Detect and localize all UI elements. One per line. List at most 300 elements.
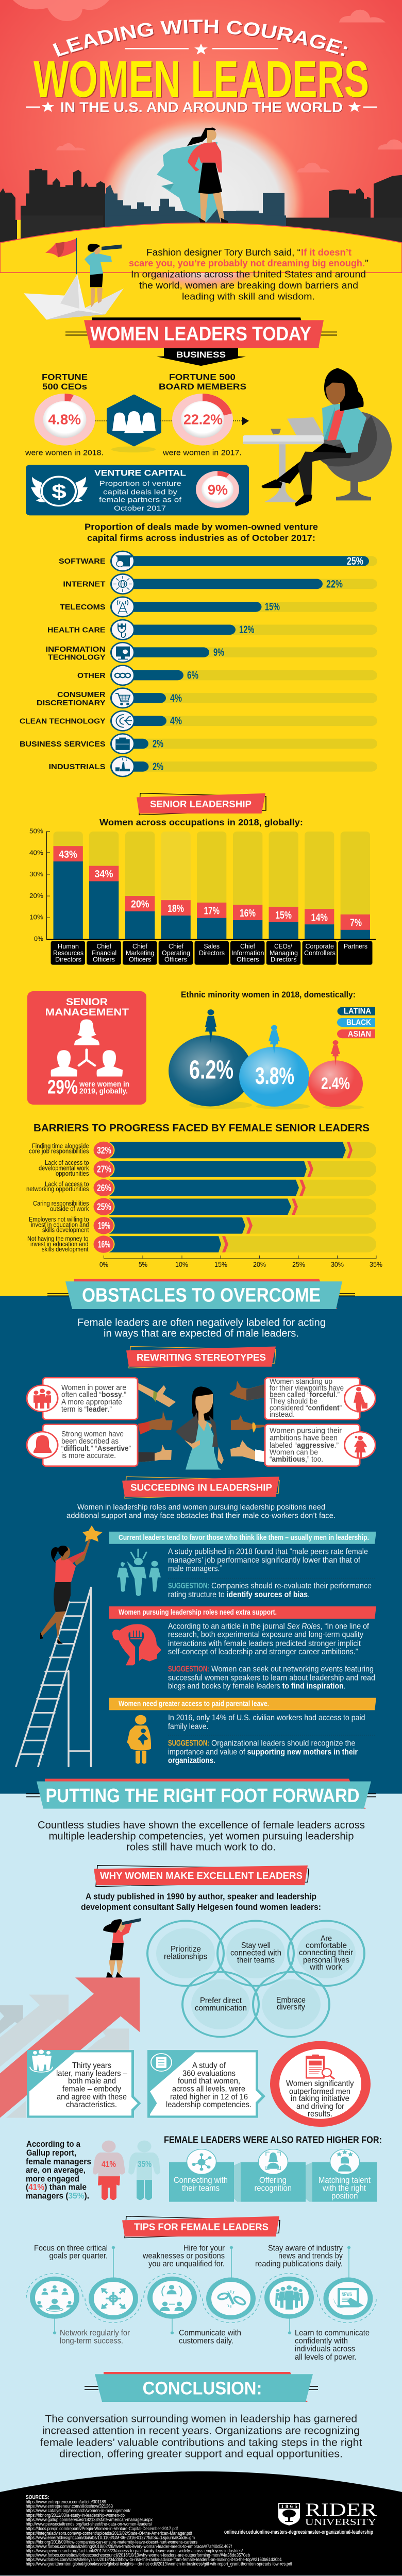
card: forceful vs confident: for their viewpoints have <box>270 1384 344 1393</box>
card: connecting with teams: their teams <box>182 2183 220 2193</box>
barrier: caring 25 percent <box>33 1197 376 1216</box>
column: chief financial officers: Officers <box>93 956 115 963</box>
x axis: 5% <box>139 1261 147 1269</box>
sources list: https://www.grantthornton.global/globalassets/global-insights---do-not-edit/2019/women-in-business/gtil-wib-report_grant-thornton-spreads-low-res.pdf <box>26 2562 292 2567</box>
barrier: not having the money 16 percent: invest in education and <box>30 1240 89 1248</box>
sun glow <box>99 115 305 291</box>
card: difficult vs assertive: Strong women have <box>61 1430 124 1438</box>
column chart: occupations <box>29 827 376 965</box>
bar: industrials: 2% <box>153 760 163 773</box>
text: gallup report: (41%) than male <box>26 2182 87 2192</box>
text: sex roles article and suggestion: According to an article in the journal Sex Roles, “In one line of <box>168 1621 369 1631</box>
column: human resources directors: Resources <box>53 949 83 957</box>
column: corporate controllers <box>302 832 337 965</box>
stems <box>54 2246 350 2334</box>
tip: stay aware of news: NEWS <box>342 2291 352 2298</box>
fortune 500 ceos stat <box>25 372 104 457</box>
column: chief information officers: Chief <box>240 942 255 950</box>
intro text: obstacles: Female leaders are often negatively labeled for acting <box>77 1316 326 1328</box>
conclusion text: direction, offering greater support and equal opportunities. <box>59 2448 343 2460</box>
title: leading with courage on an arc: LEADING WITH COURAGE: <box>53 20 347 57</box>
callout box: thirty years later: both male and <box>68 2076 116 2086</box>
card: bossy vs leader: often called “bossy.” <box>61 1391 126 1399</box>
heading: proportion of deals <box>85 522 318 543</box>
rated higher cards <box>169 2149 377 2202</box>
bar: software: 25% <box>347 555 363 567</box>
business arrow label: BUSINESS <box>176 349 226 360</box>
text: male peers study and suggestion: SUGGESTION: <box>168 1581 209 1590</box>
diagram: overlapping leadership trait circles: connecting their <box>299 1948 353 1957</box>
diagram: overlapping leadership trait circles: Stay well <box>241 1941 271 1950</box>
text: male peers study and suggestion: rating structure to identify sources of bias. <box>168 1589 310 1599</box>
icon: org hierarchy of people <box>51 1019 123 1076</box>
diagram: overlapping leadership trait circles <box>147 1921 364 2037</box>
tip: learn to communicate: individuals across <box>295 2344 355 2353</box>
barrier: caring 25 percent: 25% <box>97 1201 111 1212</box>
text: gallup report <box>26 2139 91 2200</box>
panel: senior management: SENIOR <box>66 996 108 1008</box>
text: helgesen study: A study published in 1990 by author, speaker and leadership <box>86 1892 316 1901</box>
diagram: overlapping leadership trait circles: relationships <box>164 1952 207 1961</box>
bar: business services: BUSINESS SERVICES <box>20 740 106 749</box>
tip: focus on goals: goals per quarter. <box>49 2251 108 2260</box>
illustration: woman with telescope on arrow <box>103 1918 141 1977</box>
column: chief marketing officers: Chief <box>132 942 147 950</box>
card: forceful vs confident: They should be <box>270 1398 317 1405</box>
sub-banner: why women make excellent leaders <box>94 1866 309 1887</box>
column: chief operating officers <box>159 832 193 965</box>
bar: information technology: 9% <box>213 646 224 658</box>
text: parental leave and suggestion <box>168 1713 376 1765</box>
intro text: succeeding <box>66 1503 336 1520</box>
x axis: 0% <box>99 1261 108 1269</box>
diagram: overlapping leadership trait circles: Embrace <box>276 1995 306 2005</box>
column: ceos managing directors: Directors <box>271 956 297 963</box>
icon: woman with telescope on paper boat <box>24 238 124 320</box>
column: chief financial officers: Financial <box>92 949 116 957</box>
x axis: 15% <box>214 1261 227 1269</box>
panel: venture capital: VENTURE CAPITAL <box>94 468 186 478</box>
bar: clean technology: CLEAN TECHNOLOGY <box>20 718 106 725</box>
ladder <box>16 1587 91 1767</box>
text: sex roles article and suggestion: SUGGESTION: <box>168 1664 209 1673</box>
tip: focus on goals: Focus on three critical <box>34 2243 108 2252</box>
intro quote text: Fashion designer Tory Burch said, “ <box>146 247 300 258</box>
figure: female managers 41 percent: 41% <box>102 2159 116 2169</box>
text: parental leave and suggestion: importance and value of supporting new mothers in their <box>168 1747 358 1756</box>
barrier: not having the money 16 percent: skills development <box>42 1245 89 1253</box>
conclusion text: female leaders’ valuable contributions and taking steps in the right <box>40 2436 362 2448</box>
sources list <box>26 2494 292 2567</box>
y axis: 30% <box>29 871 43 878</box>
thumbs up hands <box>138 1381 264 1462</box>
callout bar: extra support <box>109 1606 376 1619</box>
x axis: 10% <box>175 1261 188 1269</box>
column: chief operating officers: 18% <box>167 903 184 914</box>
sphere: latina 6.2 percent: 6.2% <box>189 1055 233 1084</box>
icon: clipboard with ring <box>151 2054 172 2071</box>
callout box: 360 evaluations: rated higher in 12 of 16 <box>170 2092 248 2101</box>
heading: women across occupations: Women across occupations in 2018, globally: <box>99 817 303 828</box>
sub-banner: tips for female leaders: TIPS FOR FEMALE LEADERS <box>134 2222 269 2233</box>
bar: internet: INTERNET <box>63 581 106 588</box>
barrier: networking 26 percent: networking opportunities <box>26 1185 89 1193</box>
intro quote text: leading with skill and wisdom. <box>182 291 315 302</box>
barrier: employers not willing 19 percent: Employers not willing to <box>29 1215 89 1223</box>
intro text: putting the right foot forward <box>38 1819 365 1853</box>
bar: other: OTHER <box>77 672 106 680</box>
bar: information technology: TECHNOLOGY <box>48 654 106 662</box>
diagram: overlapping leadership trait circles: Are <box>321 1934 332 1943</box>
fortune 500 ceos stat: 500 CEOs <box>42 382 87 392</box>
diagram: overlapping leadership trait circles: their teams <box>237 1956 275 1964</box>
column: partners <box>338 832 372 965</box>
fortune 500 ceos stat: were women in 2018. <box>25 449 104 457</box>
card: aggressive vs ambitious: labeled “aggressive.” <box>270 1441 339 1450</box>
callout circle: women outperformed men: results. <box>308 2109 332 2119</box>
bar: clean technology: 4% <box>170 715 182 727</box>
text: parental leave and suggestion: SUGGESTION: <box>168 1738 209 1748</box>
sub-banner: why women make excellent leaders: WHY WOMEN MAKE EXCELLENT LEADERS <box>100 1871 303 1882</box>
tip: hire for weaknesses <box>142 2243 253 2317</box>
column: sales directors: 17% <box>204 905 220 917</box>
illustration: woman on ladder reaching star <box>16 1526 103 1767</box>
card: difficult vs assertive: is more accurate. <box>61 1451 116 1460</box>
card: aggressive vs ambitious: ambitions have been <box>270 1433 338 1442</box>
column: human resources directors: Human <box>58 942 79 950</box>
y axis: 0% <box>34 936 43 943</box>
fortune 500 board members stat: 22.2% <box>183 412 223 428</box>
sources list: https://www.entrepreneur.com/article/301189 <box>26 2500 106 2505</box>
x axis: 25% <box>292 1261 305 1269</box>
bar: industrials: INDUSTRIALS <box>48 763 105 771</box>
subtitle: IN THE U.S. AND AROUND THE WORLD <box>60 99 343 115</box>
card: aggressive vs ambitious: Women pursuing their <box>270 1427 342 1435</box>
y axis: 10% <box>29 914 43 921</box>
callout box: thirty years later <box>27 2049 141 2118</box>
fortune 500 board members stat: BOARD MEMBERS <box>159 382 246 392</box>
section banner: obstacles to overcome <box>47 1279 355 1309</box>
icon: group of women <box>34 1388 51 1409</box>
barrier: finding time 32 percent: core job responsibilities <box>29 1147 89 1155</box>
card: matching talent: with the right <box>322 2183 366 2193</box>
card: matching talent <box>312 2149 377 2202</box>
bar: internet <box>63 574 377 594</box>
column: chief information officers: Officers <box>237 956 259 963</box>
logo: rider university: UNIVERSITY <box>305 2517 376 2528</box>
bar: consumer discretionary <box>37 688 377 708</box>
sub-banner: senior leadership <box>137 793 266 815</box>
card: bossy vs leader: Women in power are <box>61 1383 126 1392</box>
intro text: putting the right foot forward: multiple leadership competencies, yet women pursuing leadership <box>48 1830 354 1842</box>
column: ceos managing directors: Managing <box>270 949 298 957</box>
diagram: overlapping leadership trait circles: personal lives <box>303 1956 349 1964</box>
sources list: https://hbr.org/2012/03/a-study-in-leadership-women-do <box>26 2513 125 2518</box>
column: chief marketing officers: Marketing <box>126 949 154 957</box>
callout box: 360 evaluations: across all levels, were <box>172 2084 245 2093</box>
diagram: overlapping leadership trait circles: diversity <box>277 2003 306 2011</box>
icon: women in blue house shape <box>108 395 160 452</box>
tip: hire for weaknesses: you are unqualified for. <box>148 2259 225 2268</box>
card: forceful vs confident: been called “forceful.” <box>270 1391 340 1399</box>
card: connecting with teams: Connecting with <box>174 2175 228 2185</box>
fortune 500 ceos stat: FORTUNE <box>42 372 88 382</box>
callout box: 360 evaluations <box>147 2050 265 2118</box>
barrier: networking 26 percent: Lack of access to <box>45 1180 89 1188</box>
card: matching talent: Matching talent <box>319 2175 371 2185</box>
section banner: conclusion: CONCLUSION: <box>143 2379 262 2399</box>
tip: learn to communicate: all levels of power. <box>295 2352 357 2362</box>
tip: stay aware of news <box>255 2243 370 2317</box>
bar chart: barriers <box>26 1141 382 1269</box>
tip: learn to communicate <box>267 2279 370 2362</box>
intro text: succeeding: Women in leadership roles and women pursuing leadership positions need <box>77 1503 325 1512</box>
bar: telecoms: TELECOMS <box>60 603 105 612</box>
column: ceos managing directors <box>266 832 300 965</box>
text: male peers study and suggestion <box>168 1547 376 1599</box>
barrier: caring 25 percent: outside of work <box>50 1205 89 1212</box>
tip: stay aware of news: reading publications daily. <box>255 2259 343 2268</box>
fortune 500 board members stat: were women in 2017. <box>162 449 242 457</box>
callout box: thirty years later: and agree with these <box>57 2092 127 2101</box>
callout box: 360 evaluations: found that women, <box>178 2076 240 2086</box>
tip: network regularly: Network regularly for <box>60 2328 130 2337</box>
bar: telecoms: 15% <box>265 600 280 613</box>
barrier: employers not willing 19 percent <box>29 1215 376 1235</box>
callout box: 360 evaluations: leadership competencies. <box>166 2099 252 2109</box>
text: gallup report: managers (35%). <box>26 2191 89 2200</box>
intro quote text <box>129 247 368 302</box>
barrier: developmental work 27 percent <box>39 1159 376 1178</box>
tip: communicate with customers: Communicate with <box>179 2328 241 2337</box>
tip: network regularly <box>32 2279 130 2345</box>
intro quote text: the world, women are breaking down barriers and <box>139 280 358 291</box>
icon: people group <box>30 2049 53 2072</box>
bar: clean technology <box>20 711 377 731</box>
barrier: not having the money 16 percent: Not having the money to <box>27 1234 89 1242</box>
text: parental leave and suggestion: organizations. <box>168 1755 215 1765</box>
callout box: thirty years later: Thirty years <box>72 2060 111 2070</box>
icon: winged dollar: $ <box>52 481 66 502</box>
intro quote text: In organizations across the United States and around <box>131 269 366 280</box>
icon: woman profile with fist <box>112 1624 161 1665</box>
text: male peers study and suggestion: male managers.” <box>168 1564 222 1573</box>
sub-banner: rewriting stereotypes: REWRITING STEREOTYPES <box>137 1352 266 1363</box>
column: chief information officers: Information <box>231 949 264 957</box>
panel: venture capital: female partners as of <box>99 496 182 504</box>
bubble chart: ethnic minority women <box>169 1009 364 1109</box>
card: bossy vs leader <box>27 1378 138 1419</box>
y axis: 20% <box>29 892 43 900</box>
text: gallup report: are, on average, <box>26 2165 86 2175</box>
intro text: succeeding: additional support and may face obstacles that their male co-workers don’t face. <box>66 1512 336 1520</box>
conclusion text: increased attention in recent years. Organizations are recognizing <box>42 2425 360 2436</box>
panel: venture capital: Proportion of venture <box>99 480 181 488</box>
clouds <box>13 0 402 173</box>
donut: 9 percent <box>196 471 239 508</box>
icon: winged dollar <box>31 477 88 506</box>
y axis: 40% <box>29 849 43 857</box>
column: ceos managing directors: 15% <box>275 909 292 921</box>
sources list: https://www.forbes.com/sites/shelleyzalis/2018/04/28/how-to-rise-the-ranks-advice-from-female-leaders-on-making-it-to-the-top/#2163b61d30b1 <box>26 2557 282 2563</box>
sources list: http://www.pewsocialtrends.org/fact-sheet/the-data-on-women-leaders/ <box>26 2521 152 2527</box>
diagram: overlapping leadership trait circles: comfortable <box>306 1941 347 1950</box>
logo: rider university: 1865 <box>281 2504 297 2510</box>
fortune 500 board members stat <box>159 372 246 457</box>
sources list: https://hbr.org/2018/09/how-companies-can-ensure-maternity-leave-doesnt-hurt-womens-careers <box>26 2539 197 2545</box>
text: parental leave and suggestion: Organizational leaders should recognize the <box>211 1738 356 1748</box>
callout box: thirty years later: female – embody <box>62 2084 121 2093</box>
callout box: thirty years later: later, many leaders – <box>56 2069 127 2078</box>
illustration: seated woman with laptop <box>243 368 392 506</box>
heading: proportion of deals: capital firms across industries as of October 2017: <box>87 533 315 543</box>
callout box: 360 evaluations: 360 evaluations <box>182 2069 236 2078</box>
barrier: employers not willing 19 percent: 19% <box>98 1221 110 1231</box>
sources list: https://www.pewresearch.org/fact-tank/2017/03/23/access-to-paid-family-leave-varies-widely-across-employers-industries/ <box>26 2549 243 2554</box>
panel: venture capital: October 2017 <box>114 504 166 513</box>
legend: ethnicity: ASIAN <box>348 1029 371 1038</box>
sphere: black 3.8 percent <box>239 1025 309 1107</box>
card: difficult vs assertive: “difficult.” “Assertive” <box>61 1444 131 1452</box>
bar: health care <box>47 620 377 639</box>
section banner: conclusion <box>85 2372 318 2402</box>
callout circle: women outperformed men: Women significantly <box>286 2078 354 2088</box>
card: forceful vs confident <box>265 1378 375 1419</box>
sources list: https://www.entrepreneur.com/slideshow/321363 <box>26 2504 113 2509</box>
bar: internet: 22% <box>326 578 343 590</box>
barrier: finding time 32 percent <box>29 1141 376 1159</box>
column: sales directors: Sales <box>204 942 220 950</box>
tip: stay aware of news: news and trends by <box>278 2251 343 2260</box>
tip: hire for weaknesses: weaknesses or positions <box>142 2251 225 2260</box>
fortune 500 board members stat: FORTUNE 500 <box>169 372 236 382</box>
logo: rider university: RIDER <box>305 2500 377 2520</box>
yellow section curve edge <box>0 223 402 273</box>
column: chief information officers: 16% <box>240 907 256 919</box>
x axis: 35% <box>370 1261 382 1269</box>
callout bar: extra support: Women pursuing leadership roles need extra support. <box>119 1608 277 1617</box>
barrier: employers not willing 19 percent: invest in education and <box>31 1221 89 1228</box>
intro quote text: If it doesn’t <box>301 247 351 258</box>
sources list: https://www.gallup.com/services/182138/state-american-manager.aspx <box>26 2517 153 2522</box>
column: chief financial officers: 34% <box>95 868 113 879</box>
diagram: overlapping leadership trait circles: Prefer direct <box>200 1996 242 2005</box>
text: helgesen study <box>81 1892 321 1912</box>
diagram: overlapping leadership trait circles: with work <box>309 1962 343 1972</box>
section banner: obstacles to overcome: OBSTACLES TO OVERCOME <box>82 1284 321 1306</box>
column: corporate controllers: 14% <box>311 911 328 923</box>
column: sales directors <box>195 832 229 965</box>
card: forceful vs confident: considered “confident” <box>270 1404 342 1412</box>
dotted connectors <box>95 420 242 421</box>
logo: rider university <box>224 2500 377 2535</box>
bar: information technology <box>45 642 377 663</box>
legend: ethnicity: BLACK <box>346 1018 371 1027</box>
column: chief operating officers: Operating <box>162 949 190 957</box>
icon: woman with briefcase <box>354 1387 367 1413</box>
sources list: https://integraladvisors.com/wp-content/uploads/2013/02/State-Of-the-American-Manager.pdf <box>26 2531 192 2536</box>
bar: telecoms <box>60 597 377 617</box>
tip: hire for weaknesses: Hire for your <box>183 2243 225 2252</box>
tip: communicate with customers <box>150 2279 241 2345</box>
card: matching talent: position <box>331 2191 358 2200</box>
dashed arcs <box>26 2274 376 2323</box>
bar: software: SOFTWARE <box>59 557 105 566</box>
section banner: putting the right foot forward <box>26 1779 376 1809</box>
text: gallup report: According to a <box>26 2139 80 2149</box>
conclusion text: The conversation surrounding women in leadership has garnered <box>45 2413 357 2425</box>
icon: woman in dress <box>354 1436 367 1458</box>
bar: information technology: INFORMATION <box>45 646 105 654</box>
city skyline <box>0 169 402 246</box>
sub-banner: succeeding in leadership: SUCCEEDING IN LEADERSHIP <box>130 1482 272 1493</box>
card: aggressive vs ambitious: “ambitious,” too. <box>270 1455 323 1464</box>
column: corporate controllers: Controllers <box>304 949 336 957</box>
tip: learn to communicate: confidently with <box>295 2336 348 2345</box>
column: chief operating officers: Officers <box>164 956 187 963</box>
diagram: overlapping leadership trait circles: Prioritize <box>171 1944 201 1954</box>
barrier: networking 26 percent <box>26 1178 376 1197</box>
column: chief marketing officers: Officers <box>129 956 152 963</box>
tips timeline <box>26 2243 376 2362</box>
hero header panel <box>0 0 402 291</box>
card: connecting with teams <box>169 2149 234 2202</box>
diagram: overlapping leadership trait circles: communication <box>195 2004 247 2012</box>
sphere: asian 2.4 percent: 2.4% <box>321 1075 350 1093</box>
tip: communicate with customers: customers daily. <box>179 2336 233 2345</box>
column: human resources directors <box>51 832 85 965</box>
intro text: obstacles: in ways that are expected of male leaders. <box>104 1327 299 1339</box>
barrier: caring 25 percent: Caring responsibilities <box>33 1199 89 1207</box>
icon: group raising hand <box>117 1549 161 1596</box>
text: gallup report: more engaged <box>26 2174 79 2183</box>
subtitle: IN THE U.S. AND AROUND THE WORLD <box>61 100 343 116</box>
section banner: women leaders today <box>65 317 337 348</box>
column: human resources directors: 43% <box>59 849 77 860</box>
barrier: finding time 32 percent: 32% <box>97 1145 111 1156</box>
barrier: not having the money 16 percent: 16% <box>98 1239 110 1250</box>
sphere: latina 6.2 percent <box>169 1009 252 1106</box>
panel: venture capital: capital deals led by <box>103 488 177 496</box>
bar: consumer discretionary: DISCRETIONARY <box>37 699 106 707</box>
y axis <box>29 827 50 943</box>
callout circle: women outperformed men: outperformed men <box>289 2087 350 2096</box>
sphere: asian 2.4 percent <box>308 1040 363 1107</box>
card: offering recognition: recognition <box>255 2183 292 2193</box>
panel: venture capital <box>26 465 249 515</box>
panel: senior management <box>27 991 146 1105</box>
business arrow label <box>157 348 246 366</box>
barrier: networking 26 percent: 26% <box>97 1182 111 1193</box>
card: difficult vs assertive <box>27 1425 138 1466</box>
bar: other: 6% <box>187 669 198 681</box>
sub-banner: succeeding in leadership <box>122 1477 279 1498</box>
text: sex roles article and suggestion <box>168 1621 376 1690</box>
callout box: thirty years later: characteristics. <box>66 2099 117 2109</box>
column: partners: Partners <box>344 942 367 950</box>
panel: senior management: were women in <box>79 1080 129 1089</box>
tip: network regularly: long-term success. <box>60 2336 123 2345</box>
fortune 500 ceos stat: 4.8% <box>48 412 81 428</box>
icon: clipboard with magnifier <box>306 2055 334 2079</box>
card: offering recognition <box>241 2149 306 2202</box>
barrier: developmental work 27 percent: developmental work <box>39 1164 89 1172</box>
arrow <box>242 417 249 425</box>
sub-banner: tips for female leaders <box>122 2216 280 2238</box>
donut: 9 percent: 9% <box>208 482 228 498</box>
card: aggressive vs ambitious <box>265 1425 375 1466</box>
x axis: 20% <box>253 1261 266 1269</box>
